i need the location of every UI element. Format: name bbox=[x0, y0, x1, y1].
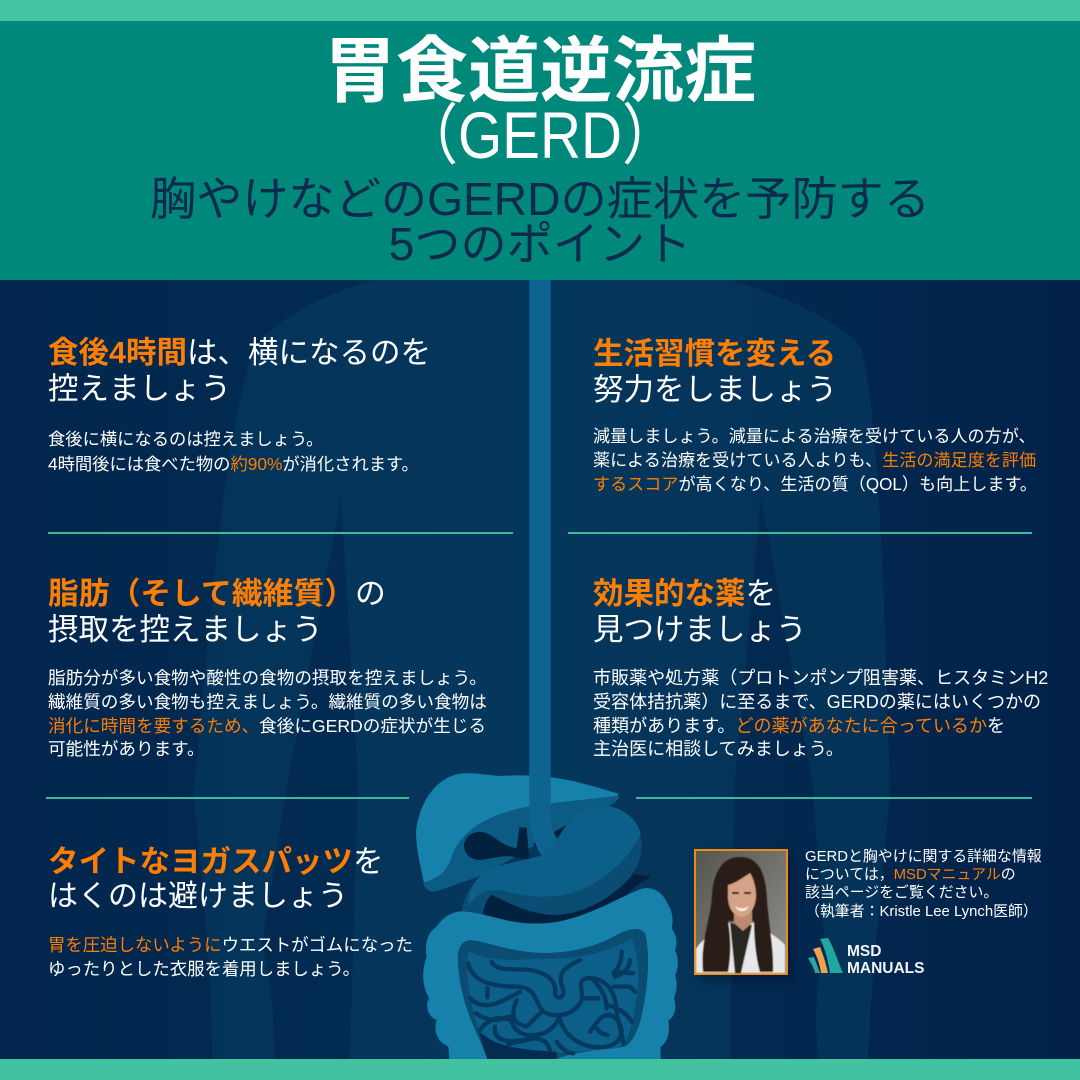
body text: 脂肪分が多い食物や酸性の食物の摂取を控えましょう。 bbox=[48, 668, 487, 688]
logo wordmark: MSD bbox=[847, 943, 881, 960]
divider left top bbox=[48, 532, 513, 534]
author photo bbox=[694, 849, 788, 975]
heading: 効果的な薬を bbox=[593, 577, 776, 611]
header panel bbox=[0, 21, 1080, 280]
heading: 脂肪（そして繊維質）の bbox=[48, 576, 386, 611]
small intestine bbox=[467, 938, 638, 1059]
logo mark bbox=[808, 938, 843, 973]
large intestine bbox=[423, 888, 678, 1059]
divider left bottom bbox=[46, 797, 409, 799]
subtitle second line: 5つのポイント bbox=[389, 218, 691, 270]
body line 2: ゆったりとした衣服を着用しましょう。 bbox=[48, 959, 360, 979]
panel: lifestyle bbox=[593, 337, 1037, 494]
body text: 胃を圧迫しないようにウエストがゴムになった bbox=[48, 935, 413, 955]
heading line 2: 努力をしましょう bbox=[593, 373, 837, 407]
heading: 生活習慣を変える bbox=[593, 337, 836, 371]
panel: stop lying down bbox=[48, 336, 431, 474]
heading line 2: 控えましょう bbox=[48, 372, 231, 406]
note line 1: GERDと胸やけに関する詳細な情報 bbox=[805, 849, 1042, 865]
note line 4: （執筆者：Kristle Lee Lynch医師） bbox=[805, 904, 1038, 920]
stomach and duodenum bbox=[462, 806, 651, 925]
heading: 食後4時間は、横になるのを bbox=[48, 336, 431, 370]
body line 2: 受容体拮抗薬）に至るまで、GERDの薬にはいくつかの bbox=[593, 692, 1041, 712]
title: 胃食道逆流症 bbox=[324, 12, 756, 117]
body text: 減量しましょう。減量による治療を受けている人の方が、 bbox=[593, 427, 1036, 446]
top accent band bbox=[0, 0, 1080, 21]
body text: 食後に横になるのは控えましょう。 bbox=[48, 429, 323, 449]
heading: タイトなヨガスパッツを bbox=[48, 845, 384, 879]
note line 2: については，MSDマニュアルの bbox=[805, 867, 1016, 883]
liver bbox=[416, 773, 619, 892]
body line 4: 可能性があります。 bbox=[48, 739, 205, 759]
panel: effective medicine bbox=[593, 577, 1048, 759]
body line 3: 消化に時間を要するため、食後にGERDの症状が生じる bbox=[48, 716, 486, 736]
logo wordmark line 2: MANUALS bbox=[847, 960, 924, 977]
heading line 2: 見つけましょう bbox=[593, 613, 806, 647]
body line 2: 薬による治療を受けている人よりも、生活の満足度を評価 bbox=[593, 451, 1036, 470]
body text: 市販薬や処方薬（プロトンポンプ阻害薬、ヒスタミンH2 bbox=[593, 668, 1048, 688]
divider right top bbox=[568, 532, 1032, 534]
note line 3: 該当ページをご覧ください。 bbox=[805, 885, 998, 901]
body line 4: 主治医に相談してみましょう。 bbox=[593, 739, 844, 759]
panel: loose clothing bbox=[48, 845, 413, 979]
author note bbox=[805, 848, 1042, 920]
divider right bottom bbox=[636, 797, 1032, 799]
heading line 2: はくのは避けましょう bbox=[48, 880, 348, 913]
gallbladder bbox=[464, 825, 567, 860]
logo: MSD Manuals bbox=[808, 938, 924, 977]
heading line 2: 摂取を控えましょう bbox=[48, 613, 322, 647]
panel: fat and fibre bbox=[48, 576, 487, 759]
body line 2: 4時間後には食べた物の約90%が消化されます。 bbox=[48, 454, 419, 474]
bottom accent band bbox=[0, 1059, 1080, 1080]
body line 3: 種類があります。どの薬があなたに合っているかを bbox=[593, 716, 1005, 736]
body line 3: するスコアが高くなり、生活の質（QOL）も向上します。 bbox=[593, 475, 1037, 494]
title abbreviation: （GERD） bbox=[401, 98, 679, 172]
subtitle: 胸やけなどのGERDの症状を予防する bbox=[150, 173, 930, 225]
esophagus bbox=[529, 280, 558, 856]
body line 2: 繊維質の多い食物も控えましょう。繊維質の多い食物は bbox=[48, 692, 487, 712]
digestive organs illustration bbox=[416, 280, 678, 1059]
